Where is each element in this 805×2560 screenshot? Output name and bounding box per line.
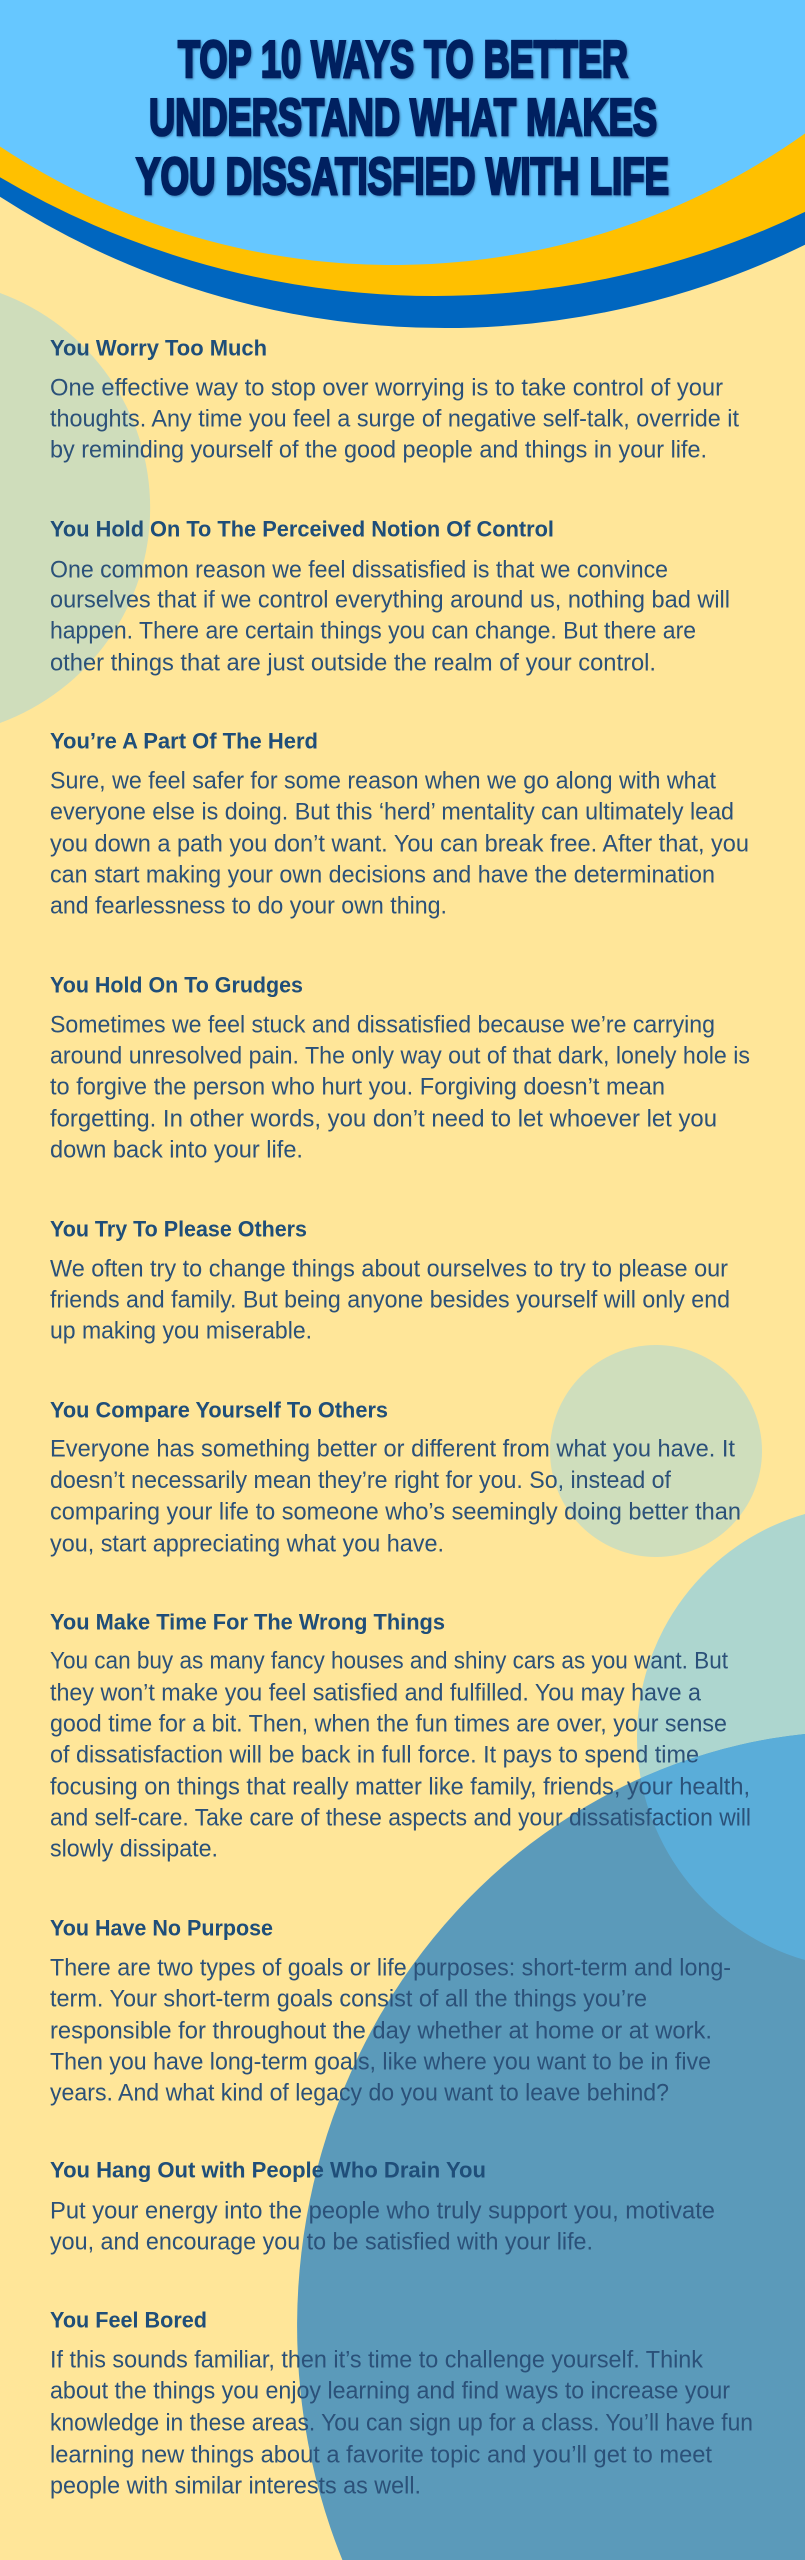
section: You Hold On To Grudges: Sometimes we feel stuck and dissatisfied because we’re carrying — [50, 1012, 715, 1039]
section: You're A Part Of The Herd: you down a path you don’t want. You can break free. After that, you — [50, 831, 749, 858]
section: You Make Time For The Wrong Things: You can buy as many fancy houses and shiny cars as you want. But — [50, 1648, 728, 1675]
section: You Try To Please Others: You Try To Please Others — [50, 1217, 307, 1242]
section: You Try To Please Others — [50, 1217, 730, 1345]
section: You Make Time For The Wrong Things: they won’t make you feel satisfied and fulfilled. You may have a — [50, 1680, 702, 1707]
section: You Hold On To Grudges: down back into your life. — [50, 1137, 303, 1164]
section: You Worry Too Much: thoughts. Any time you feel a surge of negative self-talk, override it — [50, 406, 739, 433]
section: You Worry Too Much: One effective way to stop over worrying is to take control of your — [50, 375, 723, 402]
section: You're A Part Of The Herd: can start making your own decisions and have the determination — [50, 862, 715, 889]
section: You Hold On To The Perceived Notion Of Control: happen. There are certain things you can change. But there are — [50, 618, 696, 645]
section: You Hang Out with People Who Drain You: Put your energy into the people who truly support you, motivate — [50, 2198, 715, 2225]
title — [136, 31, 669, 206]
section: You Have No Purpose — [50, 1916, 731, 2107]
large blue circle — [297, 1734, 805, 2560]
section: You Feel Bored: If this sounds familiar, then it’s time to challenge yourself. Think — [50, 2347, 704, 2374]
section: You Try To Please Others: We often try to change things about ourselves to try to please our — [50, 1256, 728, 1283]
section: You Make Time For The Wrong Things: of dissatisfaction will be back in full force. It pays to spend time — [50, 1742, 699, 1769]
section: You Hang Out with People Who Drain You — [50, 2158, 715, 2256]
section: You Hold On To The Perceived Notion Of Control: One common reason we feel dissatisfied is that we convince — [50, 557, 668, 584]
section: You Worry Too Much — [50, 336, 739, 464]
section: You Hold On To Grudges — [50, 973, 750, 1164]
section: You Make Time For The Wrong Things: slowly dissipate. — [50, 1836, 218, 1863]
section: You Hang Out with People Who Drain You: you, and encourage you to be satisfied with your life. — [50, 2229, 593, 2256]
section: You Feel Bored — [50, 2308, 753, 2500]
section: You Hold On To Grudges: to forgive the person who hurt you. Forgiving doesn’t mean — [50, 1074, 665, 1101]
section: You Compare Yourself To Others: comparing your life to someone who’s seemingly doing better than — [50, 1499, 741, 1526]
section: You Compare Yourself To Others — [50, 1398, 741, 1558]
section: You Try To Please Others: up making you miserable. — [50, 1318, 312, 1345]
section: You Make Time For The Wrong Things: focusing on things that really matter like family, friends, your health, — [50, 1774, 750, 1801]
section: You Worry Too Much: by reminding yourself of the good people and things in your life. — [50, 437, 707, 464]
section: You Have No Purpose: There are two types of goals or life purposes: short-term and long- — [50, 1955, 731, 1982]
section: You Make Time For The Wrong Things: You Make Time For The Wrong Things — [50, 1610, 445, 1635]
section: You Hold On To Grudges: around unresolved pain. The only way out of that dark, lonely hole is — [50, 1043, 750, 1070]
section: You Have No Purpose: years. And what kind of legacy do you want to leave behind? — [50, 2080, 669, 2107]
section: You Worry Too Much: You Worry Too Much — [50, 336, 267, 361]
section: You Have No Purpose: responsible for throughout the day whether at home or at work. — [50, 2018, 712, 2045]
section: You're A Part Of The Herd: everyone else is doing. But this ‘herd’ mentality can ultimately lead — [50, 799, 734, 826]
section: You Make Time For The Wrong Things: and self-care. Take care of these aspects and your dissatisfaction will — [50, 1805, 751, 1832]
section: You Feel Bored: learning new things about a favorite topic and you’ll get to meet — [50, 2442, 712, 2469]
section: You Try To Please Others: friends and family. But being anyone besides yourself will only end — [50, 1287, 730, 1314]
section: You Have No Purpose: You Have No Purpose — [50, 1916, 273, 1941]
section: You Feel Bored: knowledge in these areas. You can sign up for a class. You’ll have fun — [50, 2410, 753, 2437]
section: You Hang Out with People Who Drain You: You Hang Out with People Who Drain You — [50, 2158, 486, 2183]
section: You Compare Yourself To Others: you, start appreciating what you have. — [50, 1531, 444, 1558]
section: You're A Part Of The Herd — [50, 729, 749, 920]
section: You Hold On To Grudges: You Hold On To Grudges — [50, 973, 303, 998]
section: You Feel Bored: You Feel Bored — [50, 2308, 207, 2333]
section: You Have No Purpose: Then you have long-term goals, like where you want to be in five — [50, 2049, 711, 2076]
right green circle — [550, 1345, 762, 1557]
section: You're A Part Of The Herd: You’re A Part Of The Herd — [50, 729, 318, 754]
section: You Hold On To The Perceived Notion Of Control: other things that are just outside the realm of your control. — [50, 650, 656, 677]
section: You Feel Bored: about the things you enjoy learning and find ways to increase your — [50, 2378, 730, 2405]
section: You Hold On To The Perceived Notion Of Control — [50, 517, 730, 677]
section: You Feel Bored: people with similar interests as well. — [50, 2473, 421, 2500]
left green circle — [0, 293, 150, 723]
section: You Make Time For The Wrong Things: good time for a bit. Then, when the fun times are over, your sense — [50, 1711, 727, 1738]
section: You Make Time For The Wrong Things — [50, 1610, 751, 1863]
header arcs — [0, 0, 805, 328]
section: You Compare Yourself To Others: Everyone has something better or different from what you have. It — [50, 1436, 735, 1463]
section: You Compare Yourself To Others: doesn’t necessarily mean they’re right for you. So, instead of — [50, 1467, 671, 1494]
section: You're A Part Of The Herd: Sure, we feel safer for some reason when we go along with what — [50, 768, 716, 795]
section: You Hold On To The Perceived Notion Of Control: ourselves that if we control everything around us, nothing bad will — [50, 587, 730, 614]
section: You Have No Purpose: term. Your short-term goals consist of all the things you’re — [50, 1986, 647, 2013]
section: You Hold On To Grudges: forgetting. In other words, you don’t need to let whoever let you — [50, 1106, 717, 1133]
teal circle — [637, 1514, 805, 1960]
section: You Compare Yourself To Others: You Compare Yourself To Others — [50, 1398, 388, 1423]
section: You Hold On To The Perceived Notion Of Control: You Hold On To The Perceived Notion Of Control — [50, 517, 554, 542]
section: You're A Part Of The Herd: and fearlessness to do your own thing. — [50, 893, 447, 920]
